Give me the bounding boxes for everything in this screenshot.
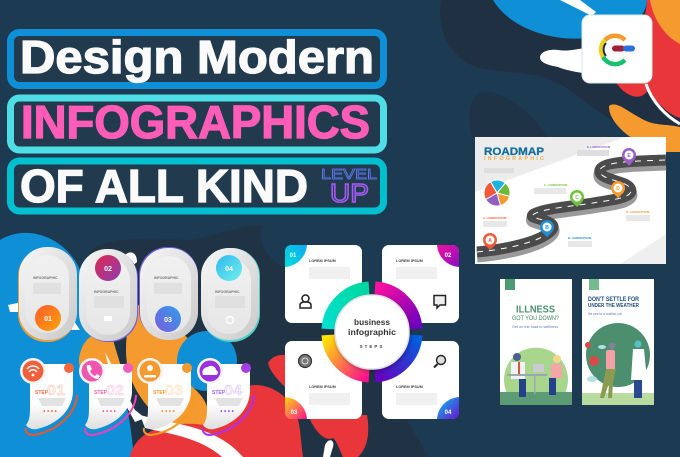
poster heading: Get on the road to wellness [512,325,558,329]
centre label: business [354,317,390,327]
logo card [582,15,652,83]
illustration: doctor and patient [507,353,562,397]
card 01 [285,245,362,323]
decorative blob centre bottom [268,355,368,457]
card 01: LOREM IPSUM [309,259,336,263]
card 01: 01 [290,253,297,259]
poster: illness [500,279,572,405]
poster heading: UNDER THE WEATHER [588,303,639,309]
title: Design Modern: Design Modern [20,31,374,83]
step card 01: • • • • [43,409,57,415]
map pins: A [488,238,492,244]
capsule 02 [79,249,138,342]
ring segments [328,288,416,376]
roadmap captions: B. LOREM IPSUM [568,236,592,240]
roadmap title: INFOGRAPHIC [484,156,544,162]
capsule 04: INFOGRAPHIC [215,290,240,294]
centre label: infographic [348,327,396,337]
step card 03 [137,358,195,435]
map pins: C [575,195,579,201]
poster heading: GOT YOU DOWN? [512,315,559,322]
roadmap captions: C. LOREM IPSUM [544,183,568,187]
roadmap captions: A. LOREM IPSUM [483,216,507,220]
poster heading: DON'T SETTLE FOR [588,297,640,303]
step card 04: STEP [212,390,226,396]
step card 04: • • • • [220,409,234,415]
capsule 01 [18,247,77,342]
capsule 03: INFOGRAPHIC [154,276,179,280]
road [477,160,666,256]
step card 04: 04 [224,382,243,399]
poster: don't settle [582,279,654,405]
centre label [348,317,396,349]
card 03: 03 [291,410,298,416]
step card 01: 01 [47,382,65,399]
step card 02: STEP [94,390,108,396]
panel: roadmap infographic [475,137,666,264]
card 04: LOREM IPSUM [396,385,423,389]
poster heading [588,297,640,316]
step card 02 [79,358,136,435]
capsule 01: INFOGRAPHIC [33,276,58,280]
map pins: E [627,153,631,159]
roadmap captions: E. LOREM IPSUM [587,145,611,149]
title: OF ALL KIND: OF ALL KIND [20,160,308,212]
decorative blobs lower left [0,233,303,457]
poster heading: We care for a healthier you [588,312,622,316]
title: INFOGRAPHICS: INFOGRAPHICS [21,96,370,148]
badge: level up: UP [330,178,369,208]
decorative blobs top right [493,0,680,152]
capsule 04 [201,248,260,342]
card 04: 04 [445,410,452,416]
pie chart [484,180,510,206]
capsule 04: 04 [225,266,233,273]
card 03: LOREM IPSUM [309,385,336,389]
card 04 [382,341,459,419]
step card 03: 03 [165,382,183,399]
roadmap title: ROADMAP [484,146,544,158]
roadmap captions: D. LOREM IPSUM [626,210,650,214]
poster heading [512,304,559,329]
step card 01 [20,358,77,435]
map pins [483,148,636,250]
card 02: LOREM IPSUM [396,259,423,263]
card 02: 02 [445,253,452,259]
roadmap captions [483,145,650,247]
step card 03: STEP [153,390,167,396]
centre label: STEPS [360,344,384,349]
badge: level up: LEVEL [321,166,377,183]
step card 02: • • • • [102,409,116,415]
card 03 [285,341,362,419]
centre circle [335,295,409,369]
badge: level up [321,166,377,208]
step card 04 [197,358,254,435]
step card 01: STEP [35,390,49,396]
step card 03: • • • • [161,409,175,415]
capsule 02: 02 [104,266,112,273]
capsule 02: INFOGRAPHIC [94,290,119,294]
card 02 [382,245,459,323]
poster heading: ILLNESS [516,304,555,316]
capsule 01: 01 [44,316,52,323]
step card 02: 02 [106,382,124,399]
capsule 03: 03 [164,317,172,324]
map pins: B [545,225,549,231]
map pins: D [616,186,620,192]
panel: business infographic steps [285,245,459,419]
illustration: patient and doctor [585,340,647,398]
capsule 03 [139,247,198,340]
